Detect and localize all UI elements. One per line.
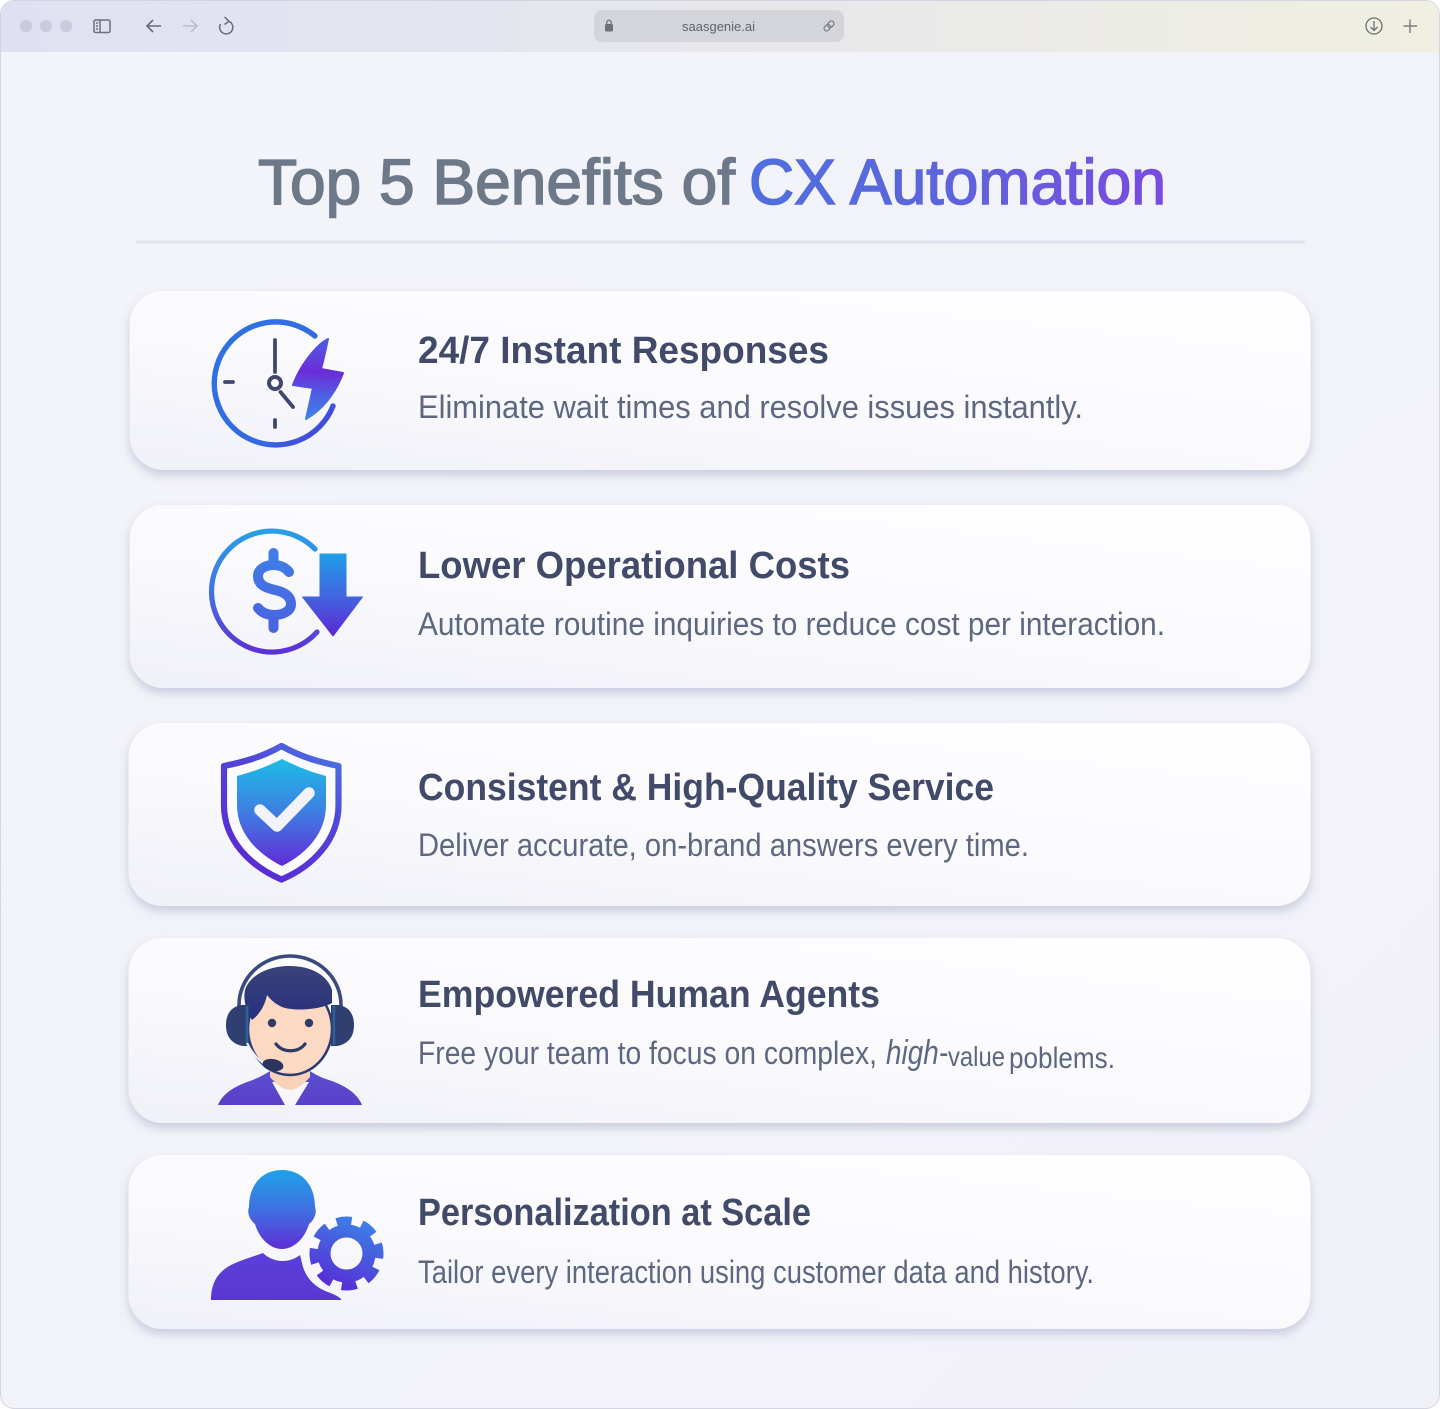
icon: person with gear [211, 1170, 379, 1300]
icon: shield with check mark [224, 746, 338, 880]
card description: Automate routine inquiries to reduce cost per interaction. [418, 606, 1165, 642]
icon: new tab plus [1404, 20, 1417, 33]
card description: Eliminate wait times and resolve issues instantly. [418, 389, 1083, 425]
icon: forward arrow [183, 20, 197, 32]
icon: download [1366, 18, 1382, 34]
card description: Deliver accurate, on-brand answers every time. [418, 827, 1029, 863]
card background [128, 1155, 1310, 1329]
browser toolbar [1, 1, 1439, 52]
card description: poblems. [1009, 1042, 1115, 1075]
panel: empowered human agents [128, 938, 1310, 1123]
panel: consistent and high-quality service [128, 723, 1310, 906]
icon: dollar with down arrow [212, 531, 362, 652]
window control dots [20, 20, 72, 32]
title divider [136, 240, 1305, 244]
url text: saasgenie.ai [682, 19, 755, 34]
card heading: Lower Operational Costs [418, 545, 850, 587]
card background [128, 723, 1310, 906]
address bar [594, 10, 844, 42]
icon: support agent with headset [218, 956, 362, 1105]
card heading: Consistent & High-Quality Service [418, 767, 994, 809]
card description: Tailor every interaction using customer data and history. [418, 1254, 1094, 1290]
card heading: Empowered Human Agents [418, 974, 880, 1016]
panel: lower operational costs [130, 505, 1310, 688]
card heading: 24/7 Instant Responses [418, 330, 829, 372]
title: CX Automation [749, 146, 1166, 218]
panel: personalization at scale [128, 1155, 1310, 1329]
icon: sidebar toggle [94, 20, 110, 32]
icon: reload [220, 17, 233, 34]
panel: 24/7 instant responses [130, 291, 1310, 470]
card description: high- [886, 1034, 948, 1072]
icon: link [823, 20, 835, 32]
icon: clock with lightning bolt [214, 322, 343, 445]
card description [418, 1034, 1115, 1075]
card description: value [948, 1041, 1005, 1072]
title [258, 146, 1166, 218]
card background [128, 938, 1310, 1123]
card heading: Personalization at Scale [418, 1192, 811, 1234]
card description: Free your team to focus on complex, [418, 1035, 877, 1071]
title: Top 5 Benefits of [258, 146, 735, 218]
icon: lock [605, 20, 613, 32]
card background [130, 291, 1310, 470]
card background [130, 505, 1310, 688]
icon: back arrow [147, 20, 161, 32]
